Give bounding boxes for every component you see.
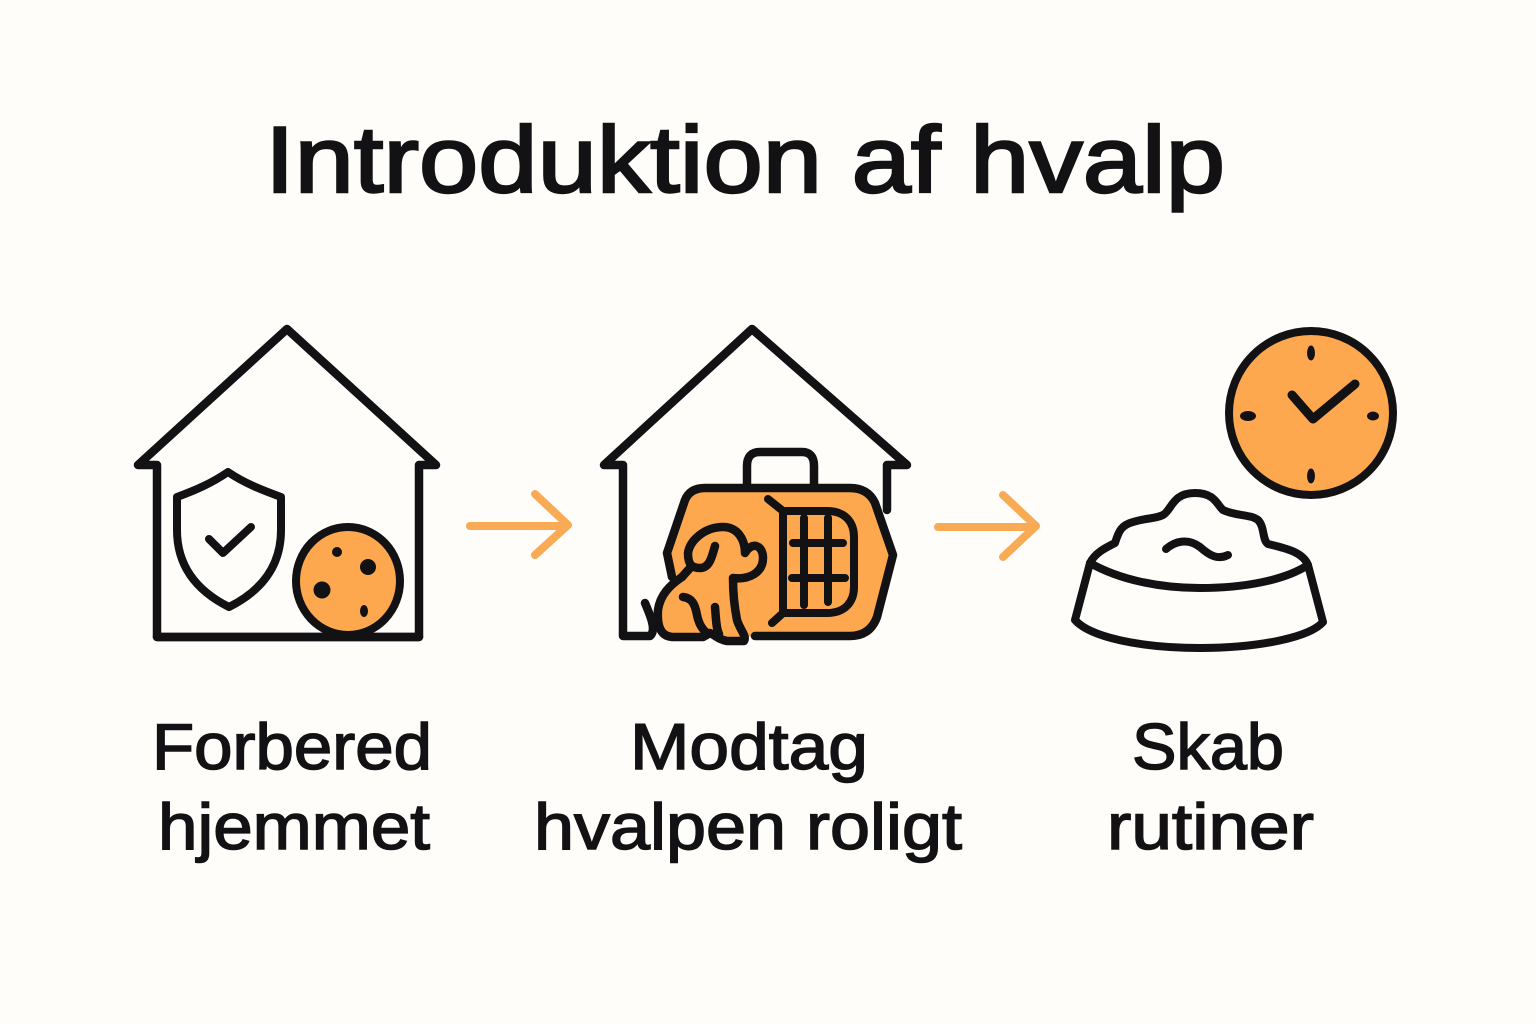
label: step 3 [1107, 710, 1314, 863]
title: Introduktion af hvalp [265, 107, 1225, 212]
food heap [1090, 493, 1308, 565]
icon: house with shield and cookie [138, 329, 436, 637]
icon: food bowl [1075, 493, 1323, 648]
label: step 2: Modtag [630, 710, 868, 783]
label: step 2: hvalpen roligt [534, 790, 962, 863]
puppy [658, 527, 763, 641]
carrier outline [667, 488, 893, 636]
label: step 1: Forbered [152, 710, 432, 783]
cookie [157, 527, 419, 637]
house outline [138, 329, 436, 637]
label: step 1 [152, 710, 432, 863]
carrier handle [747, 452, 814, 486]
icon: house with carrier and puppy [604, 329, 907, 641]
carrier door with grid [768, 499, 854, 623]
label: step 3: rutiner [1107, 790, 1314, 863]
label: step 3: Skab [1132, 710, 1284, 783]
arrow: step 1 to step 2 [470, 494, 568, 555]
icon: clock [1229, 331, 1393, 495]
shield with check mark [177, 472, 281, 607]
carrier body [657, 488, 893, 637]
label: step 1: hjemmet [158, 790, 430, 863]
house outline [604, 329, 907, 636]
label: step 2 [534, 710, 962, 863]
arrow: step 2 to step 3 [938, 495, 1036, 557]
